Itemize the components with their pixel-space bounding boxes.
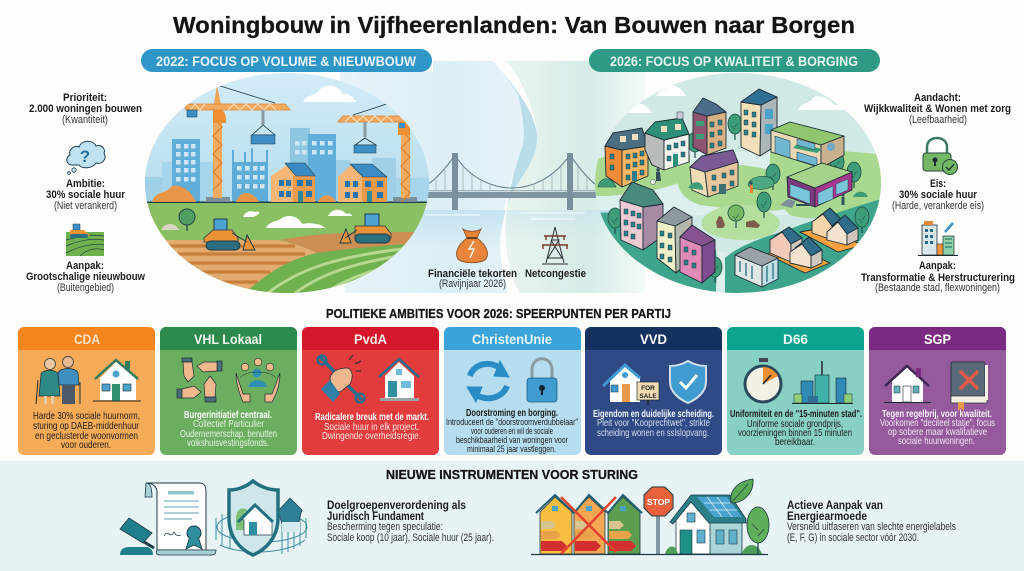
heading: political ambitions: POLITIEKE AMBITIES VOOR 2026: SPEERPUNTEN PER PARTIJ — [326, 307, 671, 321]
building: pink tall house — [620, 182, 663, 250]
text — [593, 409, 714, 439]
ground, paths and green — [595, 150, 885, 293]
left text: approach: Aanpak: — [66, 260, 104, 272]
mounds — [152, 186, 336, 202]
icon: money bag with crack — [456, 229, 488, 263]
icon: four hands — [177, 358, 222, 402]
tiny flex homes — [767, 208, 863, 273]
text: Radicalere breuk met de markt. — [315, 412, 429, 423]
text: op sobere maar kwalitatieve — [888, 427, 987, 438]
icon: fist breaking chain — [318, 355, 364, 402]
icon: shield with house and fence — [216, 481, 307, 555]
building: magenta house — [680, 225, 715, 283]
text: energy poverty: Energiearmoede — [787, 511, 867, 523]
text — [730, 409, 862, 448]
building: brown tall house — [693, 98, 726, 155]
bulldozer 2 — [340, 214, 391, 243]
right text: requirement: (Harde, verankerde eis) — [892, 200, 984, 212]
icon: electricity pylon — [542, 227, 568, 264]
building: white house with green roof — [645, 112, 689, 170]
icon: energy label houses crossed out — [536, 495, 642, 554]
tree — [179, 209, 195, 231]
text: energy poverty — [787, 500, 956, 544]
text: scheiding wonen en sslslopvang. — [597, 428, 709, 439]
panel: PvdA: PvdA — [354, 331, 387, 347]
icon: house for sale: SALE — [639, 393, 657, 400]
container home — [735, 247, 778, 287]
panel: SGP: SGP — [924, 331, 951, 347]
panel: CDA — [18, 327, 155, 455]
pill: 2026 heading — [589, 49, 880, 72]
heading: new instruments: NIEUWE INSTRUMENTEN VOOR STURING — [386, 468, 638, 482]
icon: green house with solar panels — [665, 495, 762, 554]
icon: scroll and gavel — [120, 483, 216, 555]
panel: D66 — [727, 327, 864, 455]
panel: VVD: VVD — [640, 331, 667, 347]
left text: ambition: Ambitie: — [66, 178, 105, 190]
panel: new instruments — [0, 461, 1024, 571]
panel: 2026 illustration, quality and safeguarding — [595, 73, 885, 293]
left text: priority — [29, 92, 142, 126]
people — [650, 168, 845, 228]
left text: approach: Grootschalige nieuwbouw — [26, 271, 145, 283]
text: Harde 30% sociale huurnorm, — [33, 411, 140, 422]
text: Eigendom en duidelijke scheiding. — [593, 409, 714, 420]
title: Woningbouw in Vijfheerenlanden: Van Bouwen naar Borgen — [173, 12, 855, 38]
text: volkshuisvestingsfonds. — [187, 438, 269, 449]
building: purple shop with green roof — [787, 163, 852, 207]
left text: ambition: 30% sociale huur — [46, 189, 126, 201]
left text: priority: Prioriteit: — [63, 92, 107, 104]
left text: priority: 2.000 woningen bouwen — [29, 103, 142, 115]
house 1 — [271, 163, 315, 202]
left text: ambition: (Niet verankerd) — [54, 200, 117, 212]
icon: green padlock with check — [923, 138, 958, 174]
icon: house — [884, 366, 931, 402]
right text: approach — [861, 260, 1015, 294]
icon: elderly couple — [36, 356, 80, 404]
ground and fields — [145, 202, 430, 293]
building: pale green house — [657, 207, 692, 273]
text: grid congestion: Netcongestie — [525, 268, 586, 280]
icon: book with red cross — [951, 362, 988, 411]
panel: VVD — [585, 327, 722, 455]
text: voor ouderen. — [61, 440, 111, 451]
building: orange apartment — [605, 128, 648, 187]
text: bereikbaar. — [775, 437, 815, 448]
icon: city skyline — [792, 361, 853, 404]
pill: 2022 heading: 2022: FOCUS OP VOLUME & NIEUWBOUW — [156, 54, 416, 69]
crane 2 — [337, 104, 417, 202]
icon: bulldozer on field — [66, 224, 104, 256]
text — [180, 410, 277, 449]
text: financial shortfalls: (Ravijnjaar 2026) — [439, 278, 506, 290]
text: sturing op DAEB-middenhuur — [33, 421, 139, 432]
icon: sync arrows — [467, 361, 509, 402]
text: energy poverty: (E, F, G) in sociale sector vóór 2030. — [787, 532, 919, 544]
text: Introduceert de "doorstroomverdubbelaar" — [446, 417, 578, 427]
text: target group ordinance: Doelgroepenverordening als — [327, 500, 466, 512]
left text: approach: (Buitengebied) — [57, 282, 114, 294]
right text: requirement: Eis: — [930, 178, 946, 190]
text: target group ordinance: Sociale koop (10 jaar), Sociale huur (25 jaar). — [327, 532, 494, 544]
pill: 2022 heading — [141, 49, 432, 72]
text — [315, 412, 429, 442]
right text: attention: Aandacht: — [914, 92, 961, 104]
text — [446, 408, 578, 454]
panel: ChristenUnie — [444, 327, 581, 455]
house 2 — [338, 164, 387, 202]
clouds — [243, 86, 356, 228]
icon: shield check — [670, 361, 706, 403]
panel: VHL Lokaal — [160, 327, 297, 455]
icon: house — [379, 359, 419, 401]
icon: leaf — [731, 479, 753, 503]
text: target group ordinance: Juridisch Fundament — [327, 511, 424, 523]
icon: community in hands — [236, 358, 280, 402]
background skyline — [145, 128, 430, 203]
left text: priority: (Kwantiteit) — [62, 114, 108, 126]
building: tall apartment with solar roof — [741, 89, 777, 156]
bridge — [425, 153, 600, 210]
text: target group ordinance: Bescherming tegen speculatie: — [327, 521, 443, 533]
crane 1 — [184, 85, 290, 202]
text: sociale huurwoningen. — [898, 436, 975, 447]
right text: requirement — [892, 178, 984, 212]
icon: thought cloud with question mark — [67, 141, 105, 174]
text: financial shortfalls: Financiële tekorten — [428, 268, 517, 280]
panel: D66: D66 — [783, 331, 808, 347]
building: community centre with green roof — [771, 122, 844, 168]
icon: house for sale: FOR — [641, 385, 655, 392]
icon: padlock — [527, 359, 557, 402]
icon: thought cloud with question mark: ? — [80, 147, 90, 166]
panel: ChristenUnie: ChristenUnie — [472, 331, 552, 347]
left text: ambition — [46, 178, 126, 212]
text: energy poverty: Versneld uitfaseren van slechte energielabels — [787, 521, 956, 533]
text: Oudernemerschap, benutten — [180, 429, 277, 440]
text: Sociale huur in elk project. — [324, 422, 419, 433]
text: beschikbaarheid van woningen voor — [456, 435, 568, 445]
text: voor ouderen en wil de sociale — [471, 426, 553, 436]
right text: requirement: 30% sociale huur — [899, 189, 978, 201]
text — [880, 409, 995, 447]
text: Burgerinitiatief centraal. — [184, 410, 272, 421]
icon: stop sign: STOP — [647, 497, 670, 507]
right text: approach: Aanpak: — [919, 260, 956, 272]
text: financial shortfalls — [428, 268, 517, 290]
text: Doorstroming en borging. — [466, 408, 558, 419]
icon: buildings and transformation — [918, 221, 958, 256]
text: Uniformiteit en de "15-minuten stad". — [730, 409, 862, 420]
text: Uniforme sociale grondprijs, — [747, 419, 843, 430]
icon: house for sale — [603, 364, 659, 405]
panel: PvdA — [302, 327, 439, 455]
text: en geclusterde woonvormen — [35, 431, 138, 442]
panel: VHL Lokaal: VHL Lokaal — [194, 331, 262, 347]
left text: approach — [26, 260, 145, 294]
building: central house with purple roof — [688, 150, 738, 197]
icon: stopwatch — [745, 358, 781, 402]
icon: stop sign — [644, 487, 673, 554]
panel: SGP — [869, 327, 1006, 455]
clouds — [622, 86, 846, 113]
text: Collectief Particulier — [193, 419, 264, 430]
icon: house — [93, 360, 141, 401]
bulldozer 1 — [204, 219, 255, 250]
text — [33, 411, 140, 451]
text: energy poverty: Actieve Aanpak van — [787, 500, 883, 512]
panel: 2022 illustration, volume and new construction — [145, 73, 437, 293]
right text: attention — [864, 92, 1011, 126]
trees — [598, 114, 869, 283]
text: target group ordinance — [327, 500, 494, 544]
icon: tree — [747, 507, 769, 554]
text: Dwingende overheidsregie. — [322, 431, 421, 442]
text: Pleit voor "Kooprechtwet", strikte — [597, 418, 710, 429]
pill: 2026 heading: 2026: FOCUS OP KWALITEIT & BORGING — [610, 54, 858, 69]
text: voorzieningen binnen 15 minuten — [738, 428, 852, 439]
panel: CDA: CDA — [74, 331, 100, 347]
text: minimaal 25 jaar vastleggen. — [467, 444, 556, 454]
right text: attention: (Leefbaarheid) — [909, 114, 967, 126]
panel: transition background with bridge — [340, 61, 645, 293]
